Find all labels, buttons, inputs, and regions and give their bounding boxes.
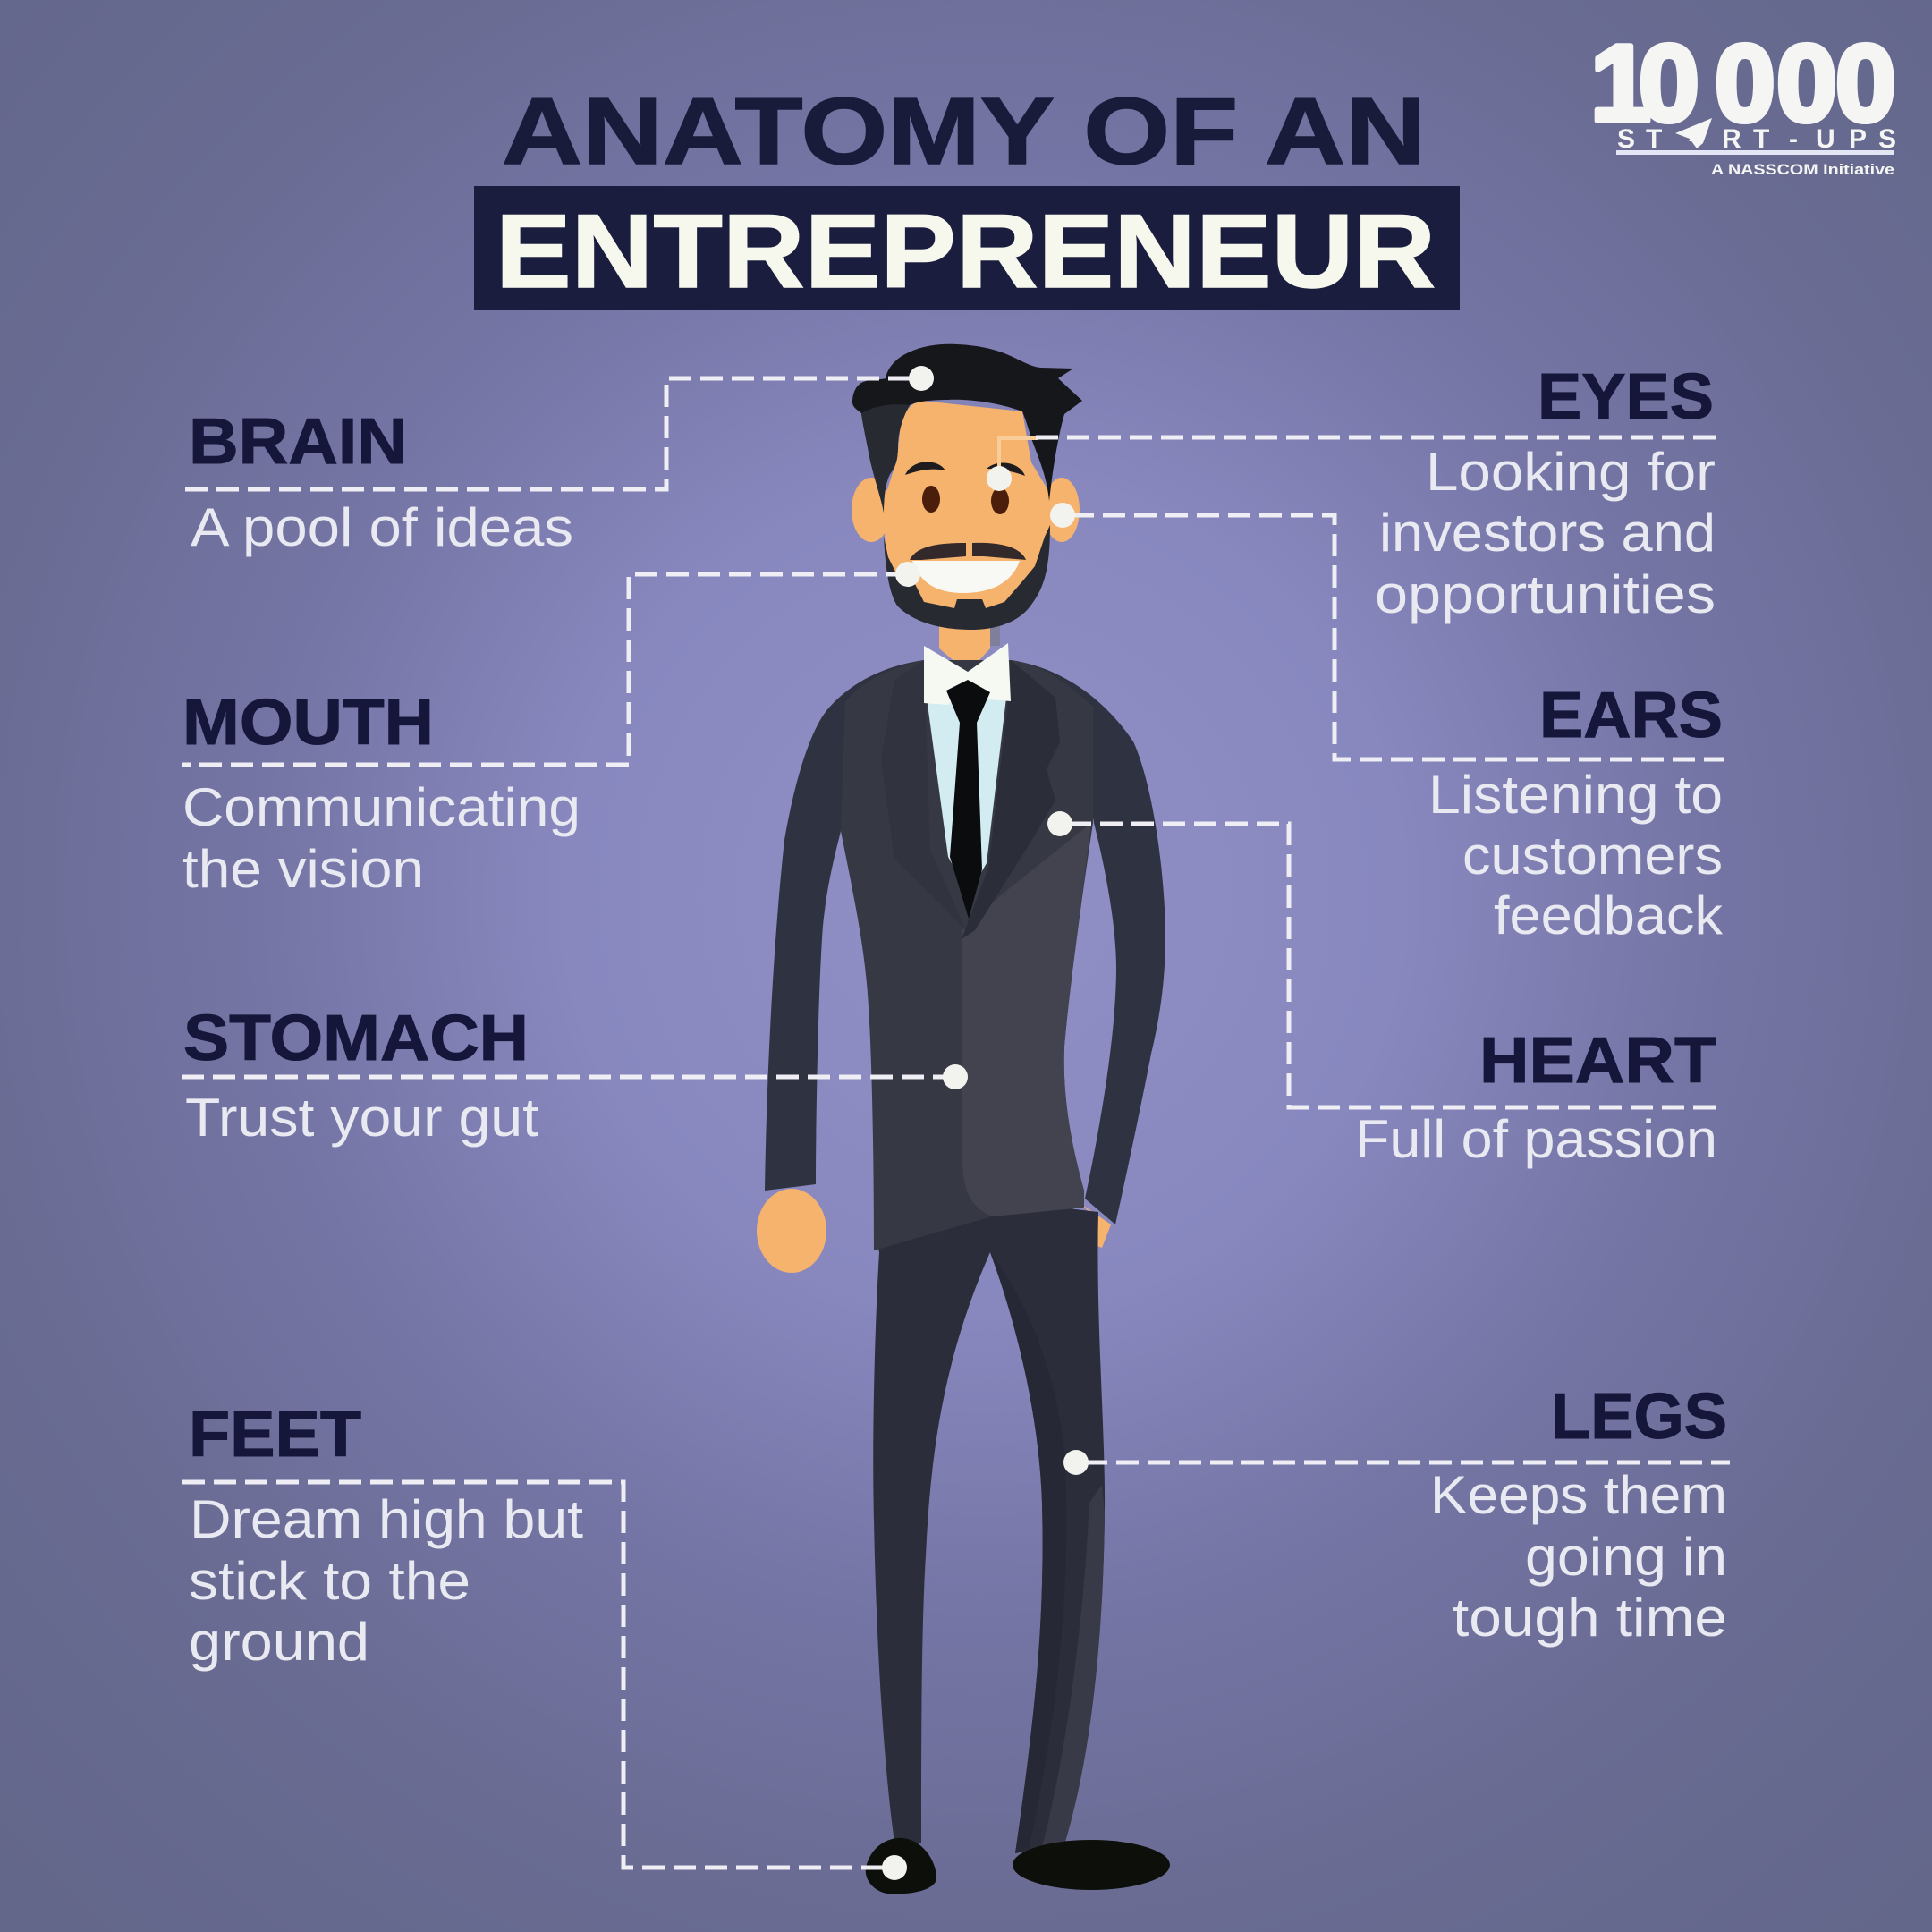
callout: ears: feedback	[1494, 886, 1724, 945]
neck	[939, 617, 990, 673]
shoes	[866, 1838, 1170, 1894]
callout: feet: FEET	[189, 1399, 361, 1470]
right arm	[1011, 660, 1165, 1224]
mustache	[910, 543, 1026, 560]
logo: 10000 start-ups: 10000	[1590, 22, 1896, 144]
callout: ears: Listening to	[1428, 765, 1723, 825]
face	[884, 401, 1049, 626]
callout: feet: Dream high but	[190, 1489, 583, 1549]
callout: heart: HEART	[1479, 1025, 1716, 1097]
callout: legs: LEGS	[1551, 1381, 1727, 1453]
callout: heart: Full of passion	[1355, 1109, 1717, 1169]
sideburn shade	[861, 404, 910, 513]
callout: feet: stick to the	[189, 1551, 470, 1611]
left arm	[765, 660, 924, 1191]
callout: eyes: Looking for	[1426, 442, 1716, 502]
icon: paper plane	[1675, 118, 1712, 148]
left hand	[757, 1189, 826, 1273]
callout: heart	[1047, 811, 1717, 1169]
right hand in pocket	[1080, 1203, 1111, 1248]
callout: ears: EARS	[1539, 680, 1723, 751]
logo: 10000 start-ups: A NASSCOM Initiative	[1711, 161, 1894, 178]
callout: legs: tough time	[1453, 1588, 1727, 1648]
callout: brain	[185, 366, 934, 557]
head	[852, 344, 1082, 630]
tie	[946, 680, 990, 919]
eyebrows	[905, 462, 1025, 476]
callout: mouth	[182, 562, 920, 899]
logo: 10000 start-ups: RT-UPS	[1722, 124, 1896, 154]
logo: 10000 start-ups: ST	[1617, 124, 1662, 154]
beard	[884, 525, 1050, 630]
callout: stomach	[182, 1003, 968, 1148]
title banner: ENTREPRENEUR	[496, 192, 1436, 309]
collar	[924, 643, 1011, 705]
callout: mouth: MOUTH	[182, 687, 434, 758]
figure: entrepreneur in suit	[757, 344, 1170, 1894]
callout: legs: Keeps them	[1430, 1465, 1727, 1525]
shirt	[927, 698, 1006, 894]
callout: ears: customers	[1462, 826, 1723, 886]
callout: mouth: the vision	[182, 839, 424, 899]
callout: eyes	[987, 361, 1716, 624]
callout: stomach: STOMACH	[183, 1003, 529, 1074]
callout: eyes: opportunities	[1375, 564, 1716, 624]
callout: eyes: EYES	[1538, 361, 1714, 433]
callout: stomach: Trust your gut	[185, 1088, 538, 1148]
teeth	[912, 561, 1020, 593]
jacket body	[841, 660, 1093, 1250]
callout: legs	[1063, 1381, 1730, 1648]
hair	[852, 344, 1082, 513]
logo: 10000 start-ups: A	[1689, 130, 1698, 144]
eyes	[922, 486, 940, 513]
ears	[852, 478, 891, 542]
trousers	[873, 1199, 1105, 1853]
title line: anatomy of an: ANATOMY OF AN	[502, 79, 1426, 184]
callout: brain: A pool of ideas	[191, 497, 573, 557]
callout: eyes: investors and	[1379, 503, 1716, 563]
callout: mouth: Communicating	[182, 777, 580, 837]
callout: brain: BRAIN	[189, 406, 407, 478]
callout: ears	[1050, 503, 1724, 945]
callout: feet: ground	[189, 1612, 369, 1672]
callout: feet	[182, 1399, 907, 1880]
title	[474, 79, 1460, 310]
callout: legs: going in	[1525, 1527, 1727, 1587]
